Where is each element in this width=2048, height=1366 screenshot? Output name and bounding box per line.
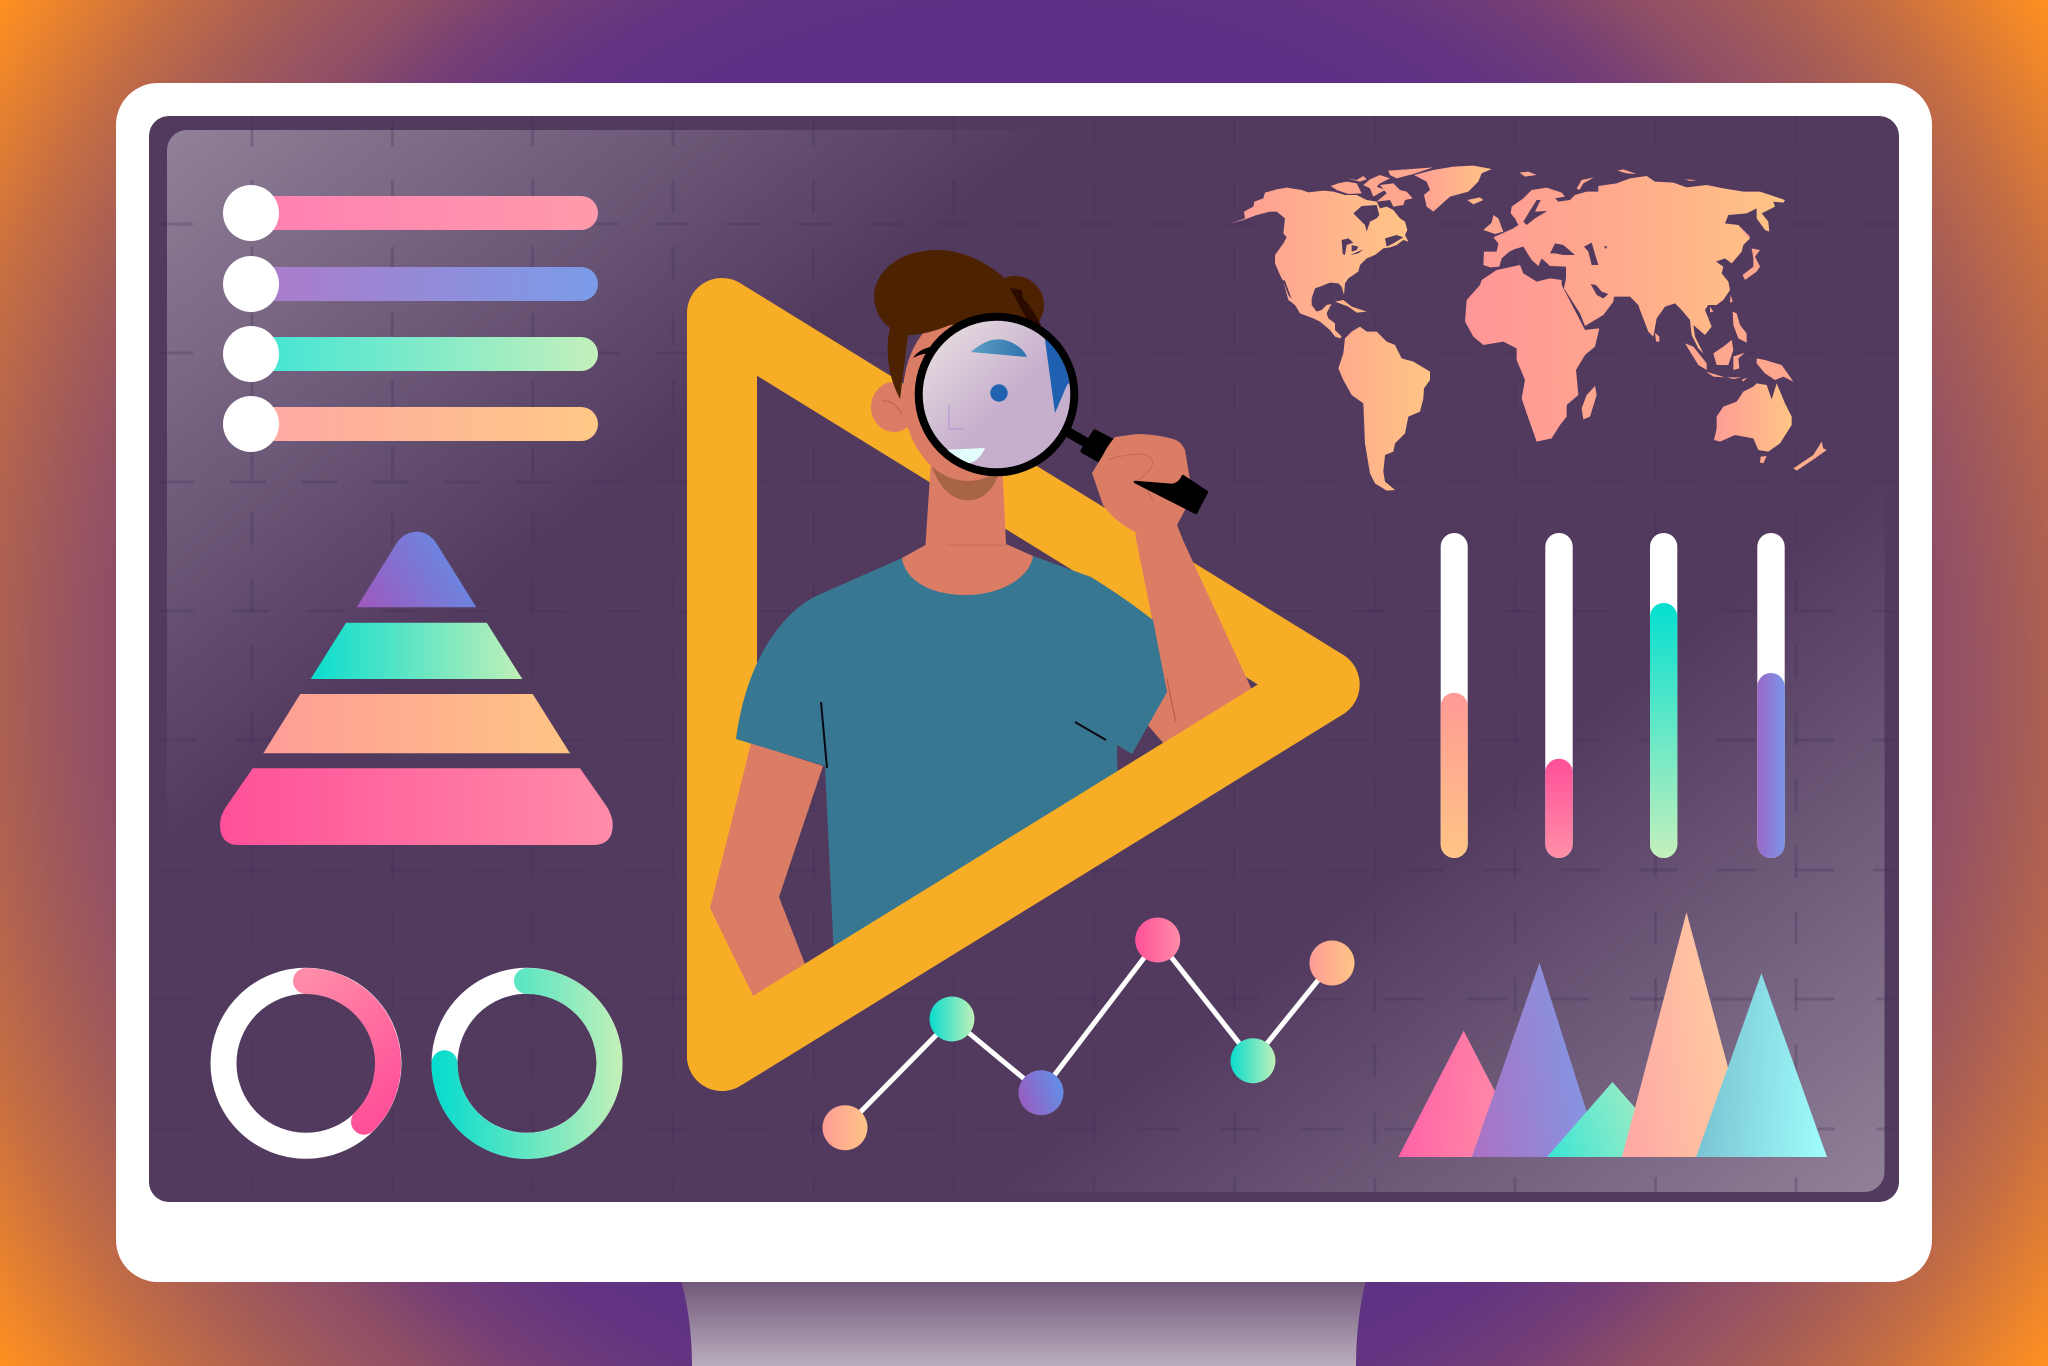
screen [149,116,1899,1202]
hand [1092,434,1190,540]
handle end [1135,476,1207,513]
arm crease [1167,679,1176,721]
donut chart: green [444,981,610,1146]
vertical bar 1 [1441,533,1468,858]
eyebrow [913,347,932,358]
Tasmania [1760,456,1767,463]
peak: green [1547,1082,1678,1157]
neck line [946,544,1006,546]
bar row: pink [223,185,598,241]
British Isles [1483,215,1503,234]
line chart [822,918,1354,1150]
t-shirt [736,556,1167,1000]
person with magnifying glass [710,250,1252,1010]
South America [1338,327,1430,491]
Australia [1714,383,1792,452]
head [903,309,1033,481]
Cuba [1335,300,1367,313]
lens side shape [1045,340,1070,413]
Iceland [1467,197,1483,204]
peak: peach [1622,912,1752,1157]
peak: pink [1398,1031,1529,1157]
magnifying glass lens [919,317,1080,472]
lens brow [971,339,1027,357]
Eurasia [1483,176,1785,353]
vertical bar charts [1441,533,1785,858]
monitor bezel [116,83,1932,1282]
pyramid chart [220,532,613,845]
Asian and Pacific islands [1519,169,1793,382]
hair [874,250,1035,399]
pyramid second tier [311,623,522,679]
screen glow panel [167,130,1884,1192]
finger crease [1107,454,1153,502]
pyramid bottom tier [220,768,613,845]
vertical bar 2 [1545,533,1573,858]
chart dots [822,918,1354,1150]
bar row: purple [223,256,598,312]
lens mouth [947,448,985,464]
Madagascar [1582,386,1597,419]
New Zealand [1793,442,1827,471]
map: Americas [1229,166,1492,491]
lens eye [990,384,1008,402]
hair bun [986,276,1044,334]
pyramid third tier [263,694,570,753]
Africa [1465,265,1599,442]
vertical bar 3 [1650,533,1677,858]
Arctic islands [1331,167,1433,207]
peak: purple [1472,963,1601,1157]
peak: cyan [1696,973,1827,1157]
shirt fold lines [821,702,1106,768]
pyramid top tier [357,532,476,607]
play triangle frame [722,313,1325,1056]
donut chart: pink [224,981,388,1146]
map: Old World [1465,169,1827,471]
magnifier handle [1066,431,1114,461]
bar row: peach [223,396,598,452]
dark hair strand [1010,288,1041,325]
neck shadow [931,465,1000,500]
lower arm [710,743,823,1010]
list of progress bars [223,185,598,452]
lens nose [949,405,964,429]
neck [902,460,1033,595]
North America [1229,188,1408,338]
bar row: green [223,326,598,382]
chart line [845,940,1332,1128]
vertical bar 4 [1757,533,1785,858]
mountain area chart [1398,912,1827,1157]
ear [871,382,917,432]
world map [1229,166,1827,491]
play triangle front edge [722,684,1325,1056]
monitor stand [681,1280,1366,1366]
raised arm [1135,525,1252,745]
Greenland [1414,166,1492,212]
